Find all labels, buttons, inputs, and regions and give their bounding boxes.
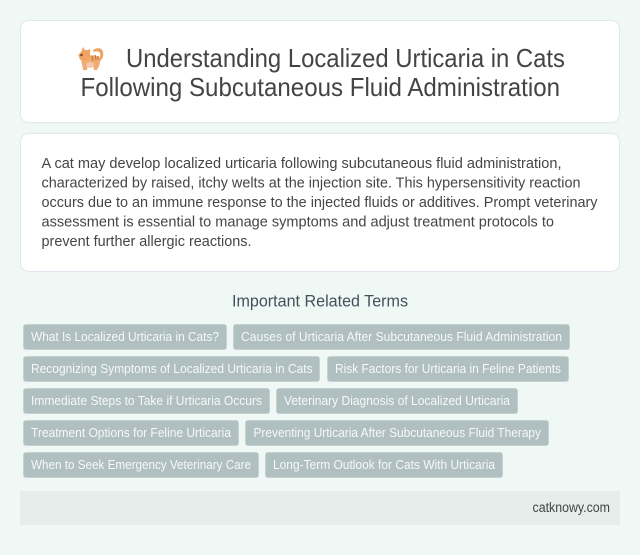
tag: Causes of Urticaria After Subcutaneous Fluid Administration — [241, 330, 562, 344]
tag — [24, 420, 238, 446]
tag: What Is Localized Urticaria in Cats? — [31, 330, 219, 344]
tag: Treatment Options for Feline Urticaria — [31, 426, 231, 440]
tag — [234, 324, 570, 350]
tag — [24, 452, 258, 478]
heading: important related terms: Important Related Terms — [232, 292, 408, 310]
tag — [24, 356, 320, 382]
tag — [328, 356, 568, 382]
description text: assessment is essential to manage symptoms and adjust treatment protocols to — [42, 214, 554, 230]
footer source text: catknowy.com — [532, 500, 610, 515]
description text: characterized by raised, itchy welts at the injection site. This hypersensitivity reaction — [42, 176, 580, 192]
tag: Immediate Steps to Take if Urticaria Occurs — [31, 394, 262, 408]
footer bar — [20, 491, 620, 525]
panel: header — [20, 20, 620, 122]
icon: orange cat — [78, 47, 103, 70]
description text — [42, 156, 598, 250]
description text: A cat may develop localized urticaria following subcutaneous fluid administration, — [42, 156, 562, 172]
tag: Risk Factors for Urticaria in Feline Patients — [335, 362, 561, 376]
tag: Preventing Urticaria After Subcutaneous Fluid Therapy — [254, 426, 542, 440]
tag — [266, 452, 502, 478]
panel: description — [20, 134, 620, 272]
tag — [246, 420, 548, 446]
tag — [276, 388, 518, 414]
tag: When to Seek Emergency Veterinary Care — [31, 458, 251, 472]
title — [80, 43, 565, 102]
tag: Recognizing Symptoms of Localized Urticaria in Cats — [31, 362, 312, 376]
description text: occurs due to an immune response to the injected fluids or additives. Prompt veterinary — [42, 195, 598, 211]
tag list — [24, 324, 570, 478]
title: Understanding Localized Urticaria in Cats — [126, 43, 565, 73]
title: Following Subcutaneous Fluid Administration — [80, 72, 560, 102]
tag: Veterinary Diagnosis of Localized Urticaria — [284, 394, 510, 408]
tag — [24, 324, 226, 350]
tag — [24, 388, 270, 414]
tag: Long-Term Outlook for Cats With Urticaria — [273, 458, 495, 472]
description text: prevent further allergic reactions. — [42, 234, 252, 250]
